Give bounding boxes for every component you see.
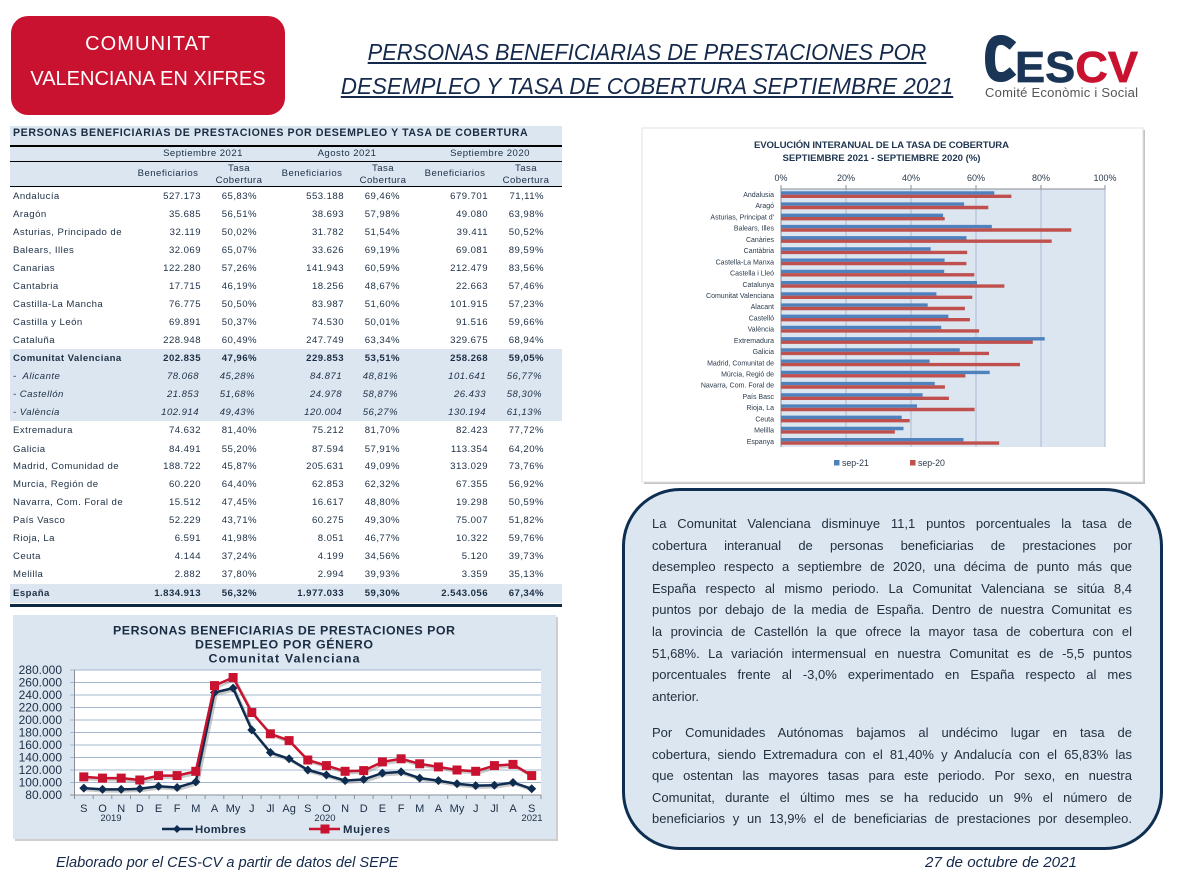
- data table: 63,98%: [509, 209, 544, 220]
- series shadow: [86, 680, 534, 791]
- data table: 59,76%: [509, 533, 544, 544]
- x axis labels: M: [415, 803, 424, 815]
- data table: 61,13%: [507, 407, 542, 418]
- line chart title: [113, 624, 455, 666]
- data table: 329.675: [450, 335, 488, 346]
- category labels: Andalusia: [743, 192, 774, 199]
- y axis labels: 280.000: [19, 663, 62, 677]
- commentary paragraph 1: anterior.: [652, 689, 699, 704]
- data table: 24.978: [310, 389, 342, 400]
- data table: 34,56%: [365, 551, 400, 562]
- commentary paragraph 2: beneficiarios y un 13,9% el de beneficiarias de prestaciones por desempleo.: [652, 811, 1132, 826]
- data table: 46,77%: [365, 533, 400, 544]
- data table: Extremadura: [13, 424, 73, 436]
- table header: Septiembre 2021: [163, 148, 243, 158]
- table header: Agosto 2021: [318, 148, 376, 158]
- line chart title: PERSONAS BENEFICIARIAS DE PRESTACIONES POR: [113, 624, 455, 638]
- x axis labels: [80, 803, 543, 824]
- category labels: Aragó: [755, 203, 774, 210]
- data table: 65,83%: [222, 191, 257, 202]
- data table: Melilla: [13, 569, 43, 580]
- line chart title: DESEMPLEO POR GÉNERO: [195, 636, 373, 652]
- data table: 2.882: [175, 569, 201, 580]
- category labels: País Basc: [742, 394, 774, 401]
- data table: 18.256: [312, 281, 344, 292]
- data table: 75.212: [312, 424, 344, 436]
- y axis labels: 80.000: [25, 788, 62, 802]
- footer date: 27 de octubre de 2021: [925, 854, 1077, 871]
- data table: Castilla-La Mancha: [13, 299, 103, 310]
- data table: Navarra, Com. Foral de: [13, 497, 123, 508]
- x axis percent labels: 20%: [837, 173, 855, 183]
- data table: 3.359: [462, 569, 488, 580]
- data table: 59,30%: [365, 588, 400, 598]
- data table: 17.715: [169, 281, 201, 292]
- commentary paragraph 1: la provincia de Castellón la que ofrece la mayor tasa de cobertura con el: [652, 624, 1132, 639]
- data table: 60,49%: [222, 335, 257, 346]
- data table: 78.068: [167, 371, 199, 382]
- commentary paragraph 2: Por Comunidades Autónomas bajamos al undécimo lugar en tasa de: [652, 725, 1132, 740]
- data table: España: [13, 588, 50, 598]
- category labels: Extremadura: [734, 338, 774, 345]
- data table: 56,77%: [507, 371, 542, 382]
- data table: - Alicante: [13, 371, 60, 382]
- data table: 32.069: [169, 245, 201, 256]
- data table: 55,20%: [222, 444, 257, 455]
- data table: 37,80%: [222, 569, 257, 580]
- data table: 81,40%: [222, 424, 257, 436]
- y axis labels: 260.000: [19, 676, 62, 690]
- x axis percent labels: [774, 173, 1117, 183]
- data table: 35,13%: [509, 569, 544, 580]
- data table: 50,59%: [509, 497, 544, 508]
- data table: 39,93%: [365, 569, 400, 580]
- category labels: Comunitat Valenciana: [706, 293, 774, 300]
- data table: 59,05%: [509, 353, 544, 364]
- x axis labels: O: [322, 803, 331, 815]
- data table: 41,98%: [222, 533, 257, 544]
- data table: 22.663: [456, 281, 488, 292]
- x axis labels: A: [211, 803, 219, 815]
- panel: bar chart coverage rate: [642, 128, 1145, 484]
- data table: 59,66%: [509, 317, 544, 328]
- data table: - Castellón: [13, 389, 64, 400]
- table header: Beneficiarios: [425, 168, 485, 179]
- x axis labels: Jl: [490, 803, 498, 815]
- data table: 51,54%: [365, 227, 400, 238]
- data table: 47,45%: [222, 497, 257, 508]
- data table: 63,34%: [365, 335, 400, 346]
- commentary paragraph 1: 51,68%. La variación intermensual en nuestra Comunitat es de -5,5 puntos: [652, 646, 1132, 661]
- data table: - València: [13, 407, 60, 418]
- x axis labels: N: [341, 803, 349, 815]
- legend: Hombres: [195, 824, 246, 836]
- bar chart legend: [834, 458, 945, 468]
- data table: 19.298: [456, 497, 488, 508]
- data table: 76.775: [169, 299, 201, 310]
- data table: 69,19%: [365, 245, 400, 256]
- x axis labels: A: [509, 803, 517, 815]
- commentary paragraph 1: España respecto al mismo periodo. La Comunitat Valenciana se sitúa 8,4: [652, 581, 1132, 596]
- category labels: Ceuta: [755, 416, 774, 423]
- data table: 69,46%: [365, 191, 400, 202]
- x axis labels: Ag: [282, 803, 296, 815]
- data table: 60,59%: [365, 263, 400, 274]
- commentary paragraph 1: [652, 516, 1132, 704]
- bar chart title: EVOLUCIÓN INTERANUAL DE LA TASA DE COBERTURA: [754, 139, 1009, 151]
- x axis labels: D: [360, 803, 368, 815]
- data table: 49,30%: [365, 515, 400, 526]
- data table: 48,80%: [365, 497, 400, 508]
- table header: Tasa: [228, 163, 250, 174]
- bar chart legend: sep-21: [842, 458, 869, 468]
- data table: 67.355: [456, 479, 488, 490]
- data table: 46,19%: [222, 281, 257, 292]
- bars: sep-21: [781, 193, 1045, 440]
- plot background: [781, 185, 1105, 447]
- title: DESEMPLEO Y TASA DE COBERTURA SEPTIEMBRE 2021: [341, 73, 953, 99]
- badge: Comunitat Valenciana en xifres: VALENCIANA EN XIFRES: [30, 68, 266, 90]
- y axis labels: 240.000: [19, 688, 62, 702]
- data table: 247.749: [306, 335, 344, 346]
- commentary paragraph 2: cobertura, siendo Extremadura con el 81,40% y Andalucía con el 65,83% las: [652, 747, 1132, 762]
- data table: 64,40%: [222, 479, 257, 490]
- data table: 2.994: [318, 569, 344, 580]
- data table: 10.322: [456, 533, 488, 544]
- y axis labels: 160.000: [19, 738, 62, 752]
- data table: 58,87%: [363, 389, 398, 400]
- category labels: Castella i Lleó: [730, 270, 774, 278]
- category labels: Balears, Illes: [734, 226, 774, 233]
- legend: Mujeres: [343, 824, 390, 836]
- data table: 43,71%: [222, 515, 257, 526]
- data table: 73,76%: [509, 461, 544, 472]
- data table: Ceuta: [13, 551, 41, 562]
- category labels: València: [748, 327, 774, 334]
- data table: 122.280: [163, 263, 201, 274]
- commentary paragraph 1: desempleo respecto a septiembre de 2020, una décima de punto más que: [652, 559, 1132, 574]
- data table: 679.701: [450, 191, 488, 202]
- data table: 37,24%: [222, 551, 257, 562]
- data table: 5.120: [462, 551, 488, 562]
- x axis labels: S: [304, 803, 311, 815]
- commentary paragraph 1: cobertura interanual de personas beneficiarias de prestaciones por: [652, 538, 1132, 553]
- data table: Madrid, Comunidad de: [13, 461, 119, 472]
- x axis percent labels: 0%: [774, 173, 788, 183]
- category labels: Galicia: [753, 349, 774, 356]
- data table: Cataluña: [13, 335, 55, 346]
- commentary paragraph 1: La Comunitat Valenciana disminuye 11,1 puntos porcentuales la tasa de: [652, 516, 1132, 531]
- line chart title: Comunitat Valenciana: [208, 652, 360, 666]
- category labels: Madrid, Comunitat de: [707, 360, 774, 367]
- data table: 51,68%: [220, 389, 255, 400]
- data table: 50,02%: [222, 227, 257, 238]
- category labels: Cantàbria: [744, 248, 774, 255]
- legend: [162, 824, 390, 836]
- data table: 202.835: [163, 353, 201, 364]
- table heading: PERSONAS BENEFICIARIAS DE PRESTACIONES POR DESEMPLEO Y TASA DE COBERTURA: [13, 127, 528, 139]
- category labels: Alacant: [751, 304, 774, 311]
- data table: 120.004: [304, 407, 342, 418]
- data table: 26.433: [454, 389, 486, 400]
- bar chart title: [754, 139, 1009, 164]
- data table: 83.987: [312, 299, 344, 310]
- data table: 89,59%: [509, 245, 544, 256]
- data table: 102.914: [161, 407, 199, 418]
- data table: 229.853: [306, 353, 344, 364]
- data table: 50,50%: [222, 299, 257, 310]
- data table: 57,23%: [509, 299, 544, 310]
- data table: 49,09%: [365, 461, 400, 472]
- x axis labels: 2020: [314, 813, 336, 824]
- data table: 53,51%: [365, 353, 400, 364]
- y axis labels: 220.000: [19, 700, 62, 714]
- panel: commentary box: [622, 488, 1163, 850]
- x axis labels: S: [528, 803, 535, 815]
- data table: 69.891: [169, 317, 201, 328]
- y axis labels: 120.000: [19, 763, 62, 777]
- category labels: Navarra, Com. Foral de: [701, 383, 774, 390]
- data table: 57,46%: [509, 281, 544, 292]
- data table: 33.626: [312, 245, 344, 256]
- data table: 74.632: [169, 424, 201, 436]
- data table: 91.516: [456, 317, 488, 328]
- x axis labels: F: [174, 803, 181, 815]
- data table: 50,37%: [222, 317, 257, 328]
- x axis labels: E: [379, 803, 386, 815]
- category labels: Asturias, Principat d': [710, 214, 774, 221]
- data table: 56,51%: [222, 209, 257, 220]
- category labels: Canàries: [746, 237, 774, 244]
- data table: 212.479: [450, 263, 488, 274]
- table header: Cobertura: [360, 175, 406, 186]
- x axis labels: D: [136, 803, 144, 815]
- data table: 205.631: [306, 461, 344, 472]
- data table: 21.853: [167, 389, 199, 400]
- bar chart title: SEPTIEMBRE 2021 - SEPTIEMBRE 2020 (%): [782, 153, 980, 164]
- data table: 87.594: [312, 444, 344, 455]
- table header: Tasa: [515, 163, 537, 174]
- data table: 47,96%: [222, 353, 257, 364]
- table header: Cobertura: [503, 175, 549, 186]
- data table: 101.915: [450, 299, 488, 310]
- data table: 74.530: [312, 317, 344, 328]
- data table: 1.834.913: [154, 588, 201, 598]
- data table: 65,07%: [222, 245, 257, 256]
- data table: 64,20%: [509, 444, 544, 455]
- category labels: Catalunya: [742, 282, 774, 289]
- data table: 48,67%: [365, 281, 400, 292]
- table header: Beneficiarios: [138, 168, 198, 179]
- data table: 35.685: [169, 209, 201, 220]
- data table: 57,98%: [365, 209, 400, 220]
- commentary paragraph 1: puntos por debajo de la media de España. Dentro de nuestra Comunitat es: [652, 602, 1132, 617]
- data table: 52.229: [169, 515, 201, 526]
- data table: 15.512: [169, 497, 201, 508]
- y axis labels: 140.000: [19, 750, 62, 764]
- data table: 60.275: [312, 515, 344, 526]
- data table: Andalucía: [13, 191, 60, 202]
- x axis labels: O: [98, 803, 107, 815]
- data table: 101.641: [448, 371, 486, 382]
- data table: 113.354: [451, 444, 488, 455]
- footer source: Elaborado por el CES-CV a partir de datos del SEPE: [56, 855, 398, 871]
- data table: 75.007: [456, 515, 488, 526]
- data table: 2.543.056: [441, 588, 488, 598]
- x axis labels: S: [80, 803, 87, 815]
- x axis labels: F: [398, 803, 405, 815]
- y axis labels: 180.000: [19, 726, 62, 740]
- badge: Comunitat Valenciana en xifres: COMUNITAT: [85, 33, 211, 55]
- logo: CES CV: Comité Econòmic i Social: [985, 85, 1138, 100]
- data table: 50,01%: [365, 317, 400, 328]
- data table: 49,43%: [220, 407, 255, 418]
- data table: Comunitat Valenciana: [13, 353, 122, 364]
- data table: 6.591: [175, 533, 201, 544]
- data table: Aragón: [13, 209, 47, 220]
- data table: 258.268: [450, 353, 488, 364]
- data table: 49.080: [456, 209, 488, 220]
- data table: Castilla y León: [13, 317, 83, 328]
- data table: 82.423: [456, 424, 488, 436]
- table header: Tasa: [372, 163, 394, 174]
- data table: 84.871: [310, 371, 342, 382]
- data table: 4.199: [318, 551, 344, 562]
- data table: 62.853: [312, 479, 344, 490]
- category labels: Castella-La Manxa: [716, 259, 774, 266]
- x axis labels: My: [226, 803, 241, 815]
- data table: 4.144: [175, 551, 201, 562]
- table header: Septiembre 2020: [450, 148, 530, 158]
- logo: CES CV: ESCV: [1015, 43, 1139, 92]
- x axis percent labels: 80%: [1032, 173, 1050, 183]
- data table: 51,60%: [365, 299, 400, 310]
- panel: line chart by gender: [13, 615, 558, 841]
- commentary paragraph 1: porcentuales frente al -3,0% experimentado en España respecto al mes: [652, 667, 1132, 682]
- data table: 32.119: [170, 227, 201, 238]
- data table: 60.220: [169, 479, 201, 490]
- data table: 527.173: [163, 191, 201, 202]
- data table: 16.617: [312, 497, 344, 508]
- y axis labels: 100.000: [19, 776, 62, 790]
- data table: 84.491: [169, 444, 201, 455]
- data table: País Vasco: [13, 515, 65, 526]
- data table: Asturias, Principado de: [13, 227, 122, 238]
- data table: 57,91%: [365, 444, 400, 455]
- data table: 48,81%: [363, 371, 398, 382]
- data table: 69.081: [456, 245, 488, 256]
- data table: Murcia, Región de: [13, 479, 99, 490]
- series: Hombres: [84, 688, 532, 789]
- logo: CES CV: [985, 35, 1139, 100]
- category labels: Castelló: [749, 315, 774, 322]
- x axis percent labels: 100%: [1093, 173, 1117, 183]
- x axis labels: J: [473, 803, 478, 815]
- x axis labels: Jl: [266, 803, 274, 815]
- x axis labels: A: [435, 803, 443, 815]
- data table: 39.411: [457, 227, 488, 238]
- data table: 57,26%: [222, 263, 257, 274]
- badge: Comunitat Valenciana en xifres: [11, 16, 285, 115]
- data table: Galicia: [13, 444, 45, 455]
- data table: 228.948: [163, 335, 201, 346]
- bar chart legend: sep-20: [918, 458, 945, 468]
- table header: Beneficiarios: [282, 168, 342, 179]
- title: [340, 39, 954, 99]
- data table: Canarias: [13, 263, 55, 274]
- data table: 130.194: [448, 407, 486, 418]
- data table: 141.943: [306, 263, 344, 274]
- series: Mujeres: [84, 678, 532, 780]
- data table: 58,30%: [507, 389, 542, 400]
- category labels: Espanya: [747, 439, 774, 446]
- x axis percent labels: 40%: [902, 173, 920, 183]
- commentary paragraph 2: que ostentan las mayores tasas para este periodo. Por sexo, en nuestra: [652, 768, 1132, 783]
- table header: [10, 126, 562, 187]
- data table: 313.029: [450, 461, 488, 472]
- plot area: [70, 670, 541, 799]
- x axis labels: My: [450, 803, 465, 815]
- data table: 45,28%: [220, 371, 255, 382]
- data table: 71,11%: [509, 191, 544, 202]
- data table: 62,32%: [365, 479, 400, 490]
- data table: 83,56%: [509, 263, 544, 274]
- commentary paragraph 2: [652, 725, 1132, 826]
- data table: 81,70%: [365, 424, 400, 436]
- x axis labels: E: [155, 803, 162, 815]
- data table: 8.051: [318, 533, 344, 544]
- data table: 68,94%: [509, 335, 544, 346]
- table header: Cobertura: [216, 175, 262, 186]
- data table: Rioja, La: [13, 533, 55, 544]
- x axis labels: 2019: [100, 813, 122, 824]
- data table: 38.693: [312, 209, 344, 220]
- category labels: Rioja, La: [746, 405, 774, 412]
- category labels: [701, 192, 774, 446]
- x axis labels: J: [249, 803, 255, 815]
- data table: 1.977.033: [297, 588, 344, 598]
- data table: 39,73%: [509, 551, 544, 562]
- x axis percent labels: 60%: [967, 173, 985, 183]
- data table: 67,34%: [509, 588, 544, 598]
- commentary paragraph 2: Comunitat, durante el último mes se ha reducido un 9% el número de: [652, 790, 1132, 805]
- data table: 77,72%: [509, 424, 544, 436]
- title: PERSONAS BENEFICIARIAS DE PRESTACIONES POR: [368, 39, 926, 65]
- x axis labels: M: [191, 803, 200, 815]
- data table: 31.782: [312, 227, 344, 238]
- x axis labels: 2021: [521, 813, 543, 824]
- category labels: Múrcia, Regió de: [721, 372, 774, 378]
- y axis labels: 200.000: [19, 713, 62, 727]
- data table: [10, 191, 562, 603]
- category labels: Melilla: [754, 428, 774, 435]
- data table: Balears, Illes: [13, 245, 74, 256]
- data table: 56,27%: [363, 407, 398, 418]
- y axis labels: [19, 663, 62, 802]
- data table: Cantabria: [13, 281, 59, 292]
- data table: 51,82%: [509, 515, 544, 526]
- data table: 553.188: [306, 191, 344, 202]
- data table: 50,52%: [509, 227, 544, 238]
- data table: 45,87%: [222, 461, 257, 472]
- x axis labels: N: [117, 803, 125, 815]
- data table: 56,92%: [509, 479, 544, 490]
- bars: sep-20: [781, 196, 1071, 443]
- data table: 188.722: [163, 461, 201, 472]
- data table: 56,32%: [222, 588, 257, 598]
